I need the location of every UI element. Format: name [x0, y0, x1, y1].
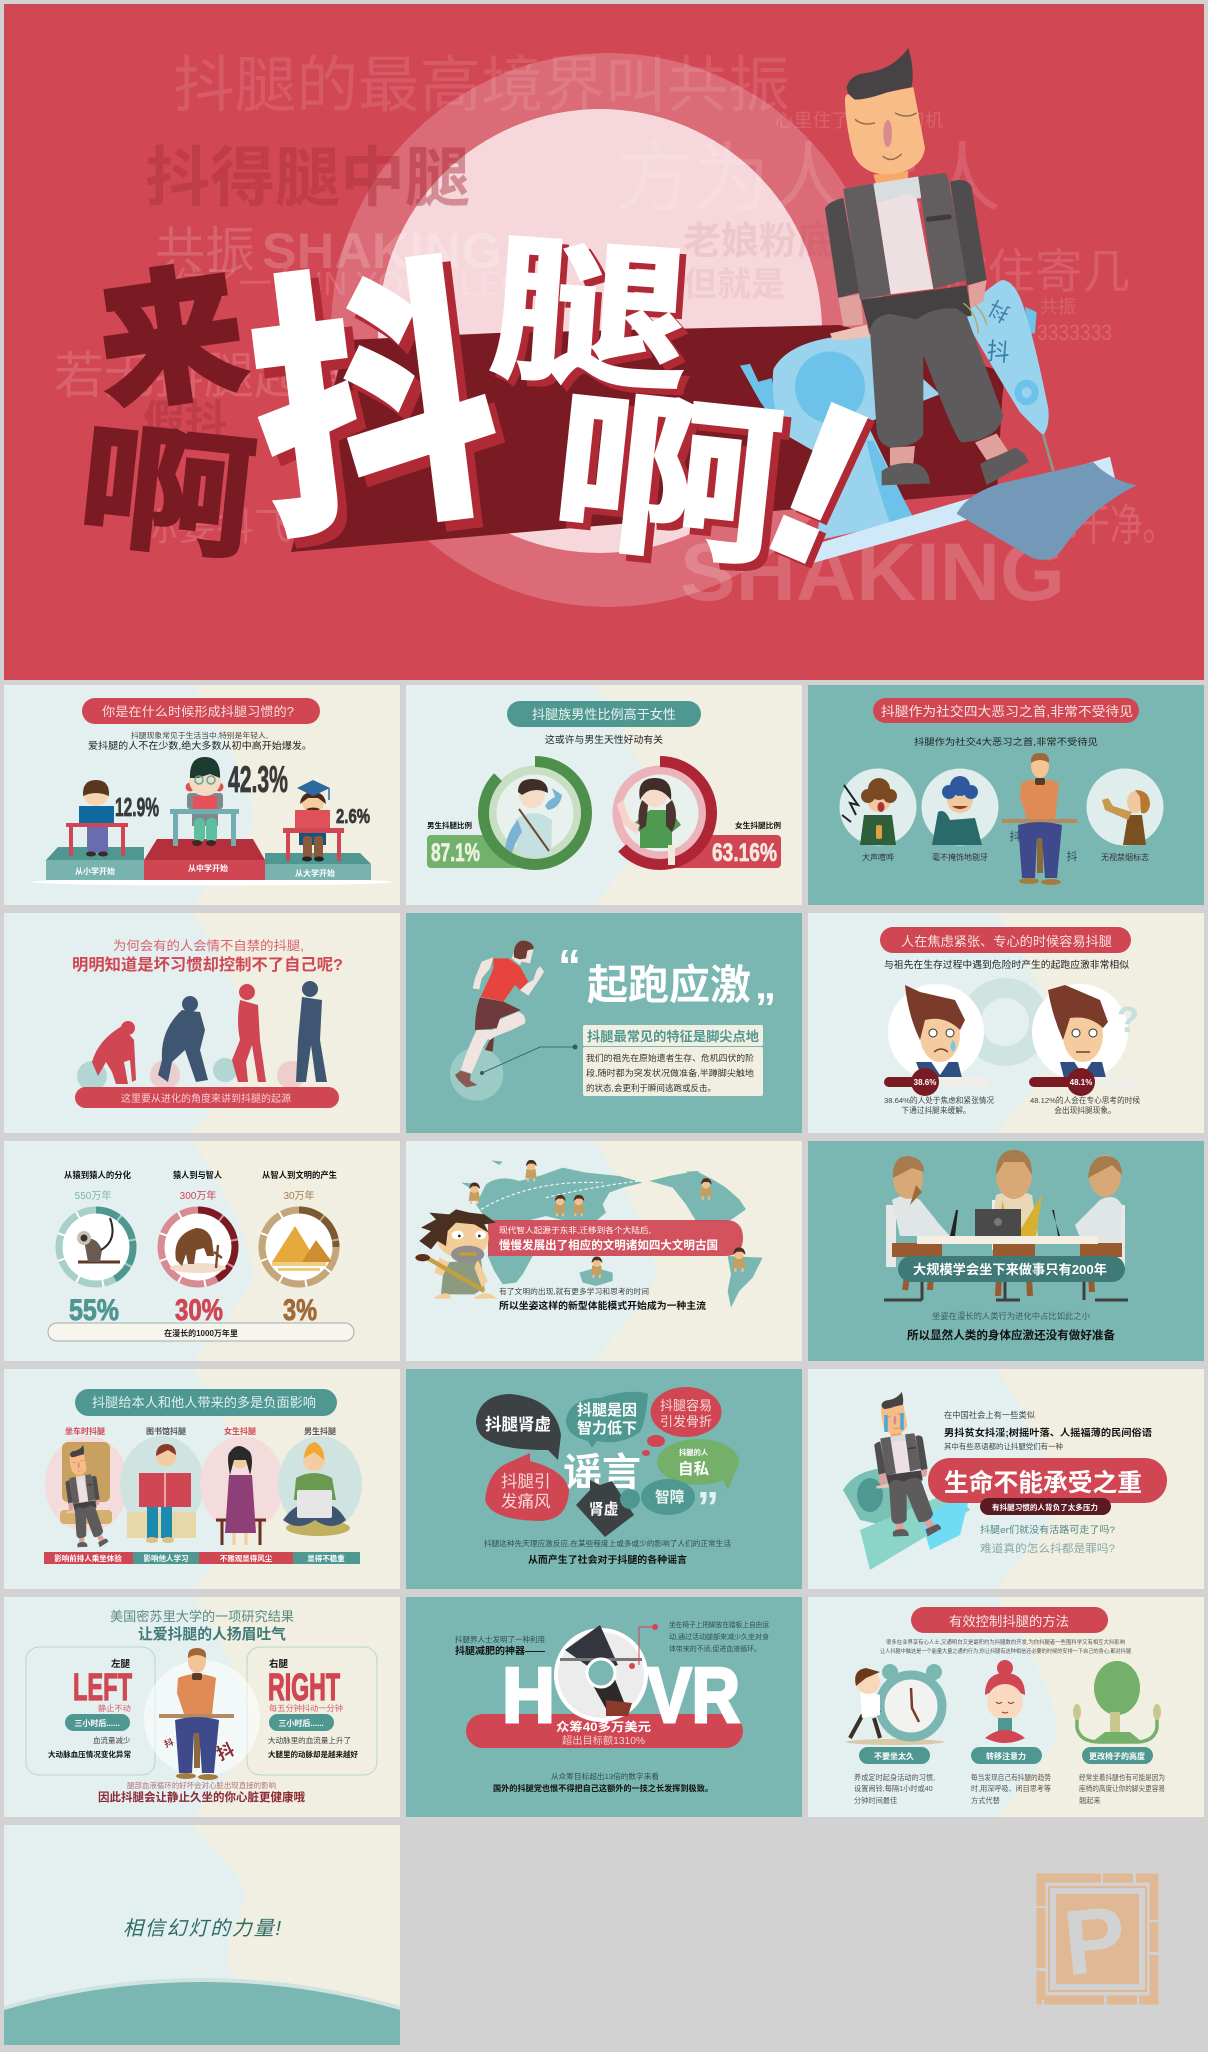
- title: 抖腿啊!: 抖: [248, 249, 519, 581]
- question heading: 明明知道是坏习惯却控制不了自己呢?: [72, 955, 343, 974]
- callout line: [629, 1624, 658, 1669]
- message pill: 大规模学会坐下来做事只有200年: [913, 1262, 1107, 1277]
- panel: hero cover: [4, 4, 1204, 680]
- machine label: 抖: [986, 338, 1011, 366]
- watermark stamp: [1041, 1878, 1154, 2000]
- captions: 无视禁烟标志: [1101, 852, 1149, 862]
- product photo circle: [554, 1625, 648, 1722]
- title: 抖腿啊!: !: [737, 355, 901, 610]
- stat numbers: 12.9%: [115, 792, 159, 822]
- intro text: 抖腿界人士发明了一种利用: [455, 1634, 545, 1644]
- heading pill: 有效控制抖腿的方法: [949, 1614, 1069, 1629]
- method text: 养成定时起身活动的习惯,: [854, 1773, 935, 1782]
- bottom text: [493, 1771, 713, 1793]
- method pills: 转移注意力: [986, 1751, 1026, 1761]
- faint background slogans: [54, 51, 1175, 618]
- captions: [862, 852, 1149, 862]
- bubble: selfish: [657, 1439, 739, 1490]
- faint background slogans: 方为人上人: [616, 137, 1001, 222]
- scenario labels: [65, 1426, 336, 1436]
- captions: 大声喧哗: [862, 852, 894, 862]
- product description: [669, 1620, 769, 1653]
- title: 抖腿啊!: 啊: [541, 371, 792, 591]
- figure: worried man: [874, 1392, 941, 1536]
- dome decoration: [4, 1978, 400, 2045]
- message pill: [898, 1256, 1125, 1282]
- female ring chart: [608, 762, 712, 865]
- intro text: [455, 1634, 546, 1657]
- figure: seated man: [159, 1648, 234, 1780]
- scenario labels: 图书馆抖腿: [146, 1426, 186, 1436]
- intro text: 在中国社会上有一些类似: [944, 1410, 1036, 1420]
- closing quote: ”: [697, 1483, 719, 1532]
- question mark: ?: [1117, 999, 1139, 1040]
- bubble: kidney weakness: 抖腿肾虚: [485, 1414, 551, 1434]
- funding text: 超出目标额1310%: [562, 1734, 645, 1747]
- podium: 从大学开始: [295, 868, 335, 878]
- faint background slogans: 3333333: [1037, 320, 1112, 345]
- percentage values: [69, 1294, 317, 1327]
- icon: chair: [1073, 1661, 1161, 1742]
- intro text: 抖腿现象常见于生活当中,特别是年轻人,: [131, 730, 268, 740]
- male label and value: 男生抖腿比例: [427, 820, 472, 830]
- ring: mammoth: [158, 1207, 238, 1287]
- message band: 慢慢发展出了相应的文明诸如四大文明古国: [499, 1238, 718, 1252]
- faint background slogans: 抖得腿中腿: [145, 141, 470, 214]
- scenario labels: 坐车时抖腿: [65, 1426, 105, 1436]
- heading pill: [873, 698, 1139, 723]
- method pills: 更改椅子的高度: [1089, 1751, 1145, 1761]
- quote heading: 起跑应激: [587, 962, 751, 1008]
- figure: girl: [216, 1446, 266, 1545]
- left leg card: 静止不动: [98, 1703, 131, 1713]
- question heading: [72, 938, 343, 974]
- left leg card: [26, 1647, 155, 1775]
- faint background slogans: 你住寄几: [940, 245, 1130, 298]
- stat numbers: 2.6%: [336, 806, 370, 828]
- body text: 有了文明的出现,就有更多学习和思考的时间: [499, 1286, 649, 1296]
- progress bar 48.1%: 48.1%: [1070, 1078, 1092, 1087]
- figure: college student: [283, 780, 344, 862]
- caption pill: 这里要从进化的角度来讲到抖腿的起源: [121, 1092, 291, 1105]
- background circles: [45, 1436, 362, 1532]
- panel: closing slide: [4, 1825, 400, 2045]
- bottom text: 从众筹目标超出13倍的数字来看: [551, 1771, 660, 1781]
- captions: 38.64%的人处于焦虑和紧张情况: [884, 1095, 994, 1105]
- right leg card: 大动脉里的血流量上升了: [268, 1735, 351, 1745]
- conclusion: 因此抖腿会让静止久坐的你心脏更健康哦: [98, 1790, 305, 1804]
- faint background slogans: 住了一台 IN YOUR LEG: [173, 265, 526, 302]
- method text: 经常坐着抖腿也有可能是因为: [1079, 1773, 1165, 1782]
- machine label: [985, 294, 1014, 366]
- panel: when the habit forms: [4, 685, 400, 905]
- panel: gender ratio: [406, 685, 802, 905]
- left leg card: 三小时后......: [74, 1718, 120, 1728]
- bubble: selfish: 抖腿的人: [679, 1448, 709, 1457]
- bubble: fractures: 引发骨折: [660, 1414, 712, 1429]
- faint background slogans: 老娘粉底盒: [683, 221, 873, 263]
- bubble: selfish: 自私: [678, 1460, 710, 1478]
- bubble: kidney diamond: 肾虚: [589, 1500, 618, 1518]
- word HOVR: [502, 1651, 740, 1739]
- method text: 翘起来: [1079, 1796, 1101, 1805]
- title: 抖腿啊!: 啊: [548, 378, 799, 598]
- heading pill: 你是在什么时候形成抖腿习惯的?: [102, 704, 294, 719]
- cloud: retardation: [620, 1479, 695, 1515]
- heading pill: 抖腿作为社交四大恶习之首,非常不受待见: [881, 704, 1133, 719]
- right leg card: 每五分钟抖动一分钟: [269, 1703, 343, 1713]
- conclusion: 腿部血液循环的好坏会对心脏出现直接的影响: [127, 1781, 276, 1790]
- title: 来啊: [70, 252, 263, 579]
- right leg card: 三小时后......: [278, 1718, 324, 1728]
- bubble: low intelligence: [566, 1392, 648, 1448]
- panel: control methods: [808, 1597, 1204, 1817]
- heading: 让爱抖腿的人扬眉吐气: [138, 1625, 286, 1643]
- faint background slogans: 共振: [155, 223, 255, 279]
- closing questions: 难道真的怎么抖都是罪吗?: [980, 1541, 1115, 1555]
- panel: starting-blocks stress: [406, 913, 802, 1133]
- word: rumour: 谣言: [563, 1452, 641, 1495]
- halo circle: [144, 1660, 260, 1776]
- shake marks: 抖: [1066, 849, 1078, 863]
- title: 抖腿啊!: 抖: [239, 240, 510, 572]
- body text: [499, 1286, 706, 1312]
- intro text: 让人抖腿中触这是一个能量大量之通的行为,你让抖腿有这种相信还必要的时候的安排一下自己的身心,都对抖腿: [880, 1647, 1131, 1655]
- faint background slogans: 共振: [1040, 297, 1076, 317]
- headline pill: [928, 1458, 1167, 1503]
- panel: rumours: [406, 1369, 802, 1589]
- ring: pyramids: [259, 1207, 339, 1287]
- captions: 毫不掩饰地剔牙: [932, 852, 988, 862]
- right leg card: 右腿: [269, 1658, 289, 1670]
- year labels: 300万年: [180, 1189, 216, 1202]
- title: 抖腿啊!: 腿: [485, 221, 695, 410]
- subtitle: 与祖先在生存过程中遇到危险时产生的起跑应激非常相似: [884, 958, 1129, 971]
- right leg card: RIGHT: [268, 1667, 340, 1709]
- female label and value: 女生抖腿比例: [735, 820, 781, 830]
- body text: [484, 1538, 731, 1566]
- panel: research result: [4, 1597, 400, 1817]
- left leg card: LEFT: [73, 1667, 132, 1709]
- explanation box: 我们的祖先在原始遗者生存、危机四伏的阶: [586, 1053, 755, 1063]
- panel: migration map: [406, 1141, 802, 1361]
- title: 来啊: 来: [90, 252, 253, 429]
- machine label: 抖: [985, 294, 1014, 326]
- method text: 座椅的高度让你的脚尖更容易: [1079, 1784, 1165, 1793]
- bubble: low intelligence: 抖腿是因: [577, 1401, 637, 1419]
- captions: 48.12%的人会在专心思考的时候: [1030, 1095, 1140, 1105]
- captions: 下通过抖腿来缓解。: [901, 1105, 971, 1115]
- figure: primary pupil: [66, 780, 128, 856]
- icon: alarm clock: [846, 1664, 944, 1745]
- left leg card: 左腿: [111, 1658, 131, 1670]
- cloud: retardation: 智障: [655, 1488, 685, 1506]
- bubble: low intelligence: 智力低下: [577, 1419, 637, 1437]
- portrait: focused man: [1032, 984, 1128, 1080]
- heading pill: [911, 1607, 1108, 1633]
- faint background slogans: 假抖: [143, 397, 227, 444]
- intro text: [944, 1410, 1153, 1451]
- second caveman: [733, 1247, 745, 1272]
- panel: sitting only 200 years: [808, 1141, 1204, 1361]
- captions: 会出现抖腿现象。: [1054, 1105, 1116, 1115]
- timeline caption: [48, 1323, 354, 1341]
- figure: caveman: [415, 1209, 498, 1299]
- icon: tooth picker: [922, 768, 998, 846]
- stat numbers: 42.3%: [228, 759, 288, 800]
- male label and value: 87.1%: [431, 839, 480, 867]
- funding text: 众筹40多万美元: [556, 1719, 651, 1734]
- shake marks: [163, 1736, 237, 1764]
- funding text: [556, 1719, 651, 1747]
- captions: [884, 1095, 1140, 1115]
- bubble: kidney weakness: [476, 1394, 561, 1460]
- title: 来啊: 啊: [70, 409, 263, 579]
- word HOVR: H: [502, 1651, 555, 1739]
- stat numbers: [115, 759, 370, 828]
- key point box: [583, 1025, 763, 1046]
- left leg card: 血流量减少: [93, 1735, 131, 1745]
- heading: [110, 1609, 294, 1643]
- subtitle: 这或许与男生天性好动有关: [545, 733, 663, 746]
- percentage values: 30%: [175, 1294, 223, 1327]
- heading pill: 人在焦虑紧张、专心的时候容易抖腿: [901, 934, 1112, 949]
- heading pill: [880, 927, 1131, 953]
- faint background slogans: 但就是: [683, 266, 785, 304]
- heading pill: [75, 1389, 337, 1416]
- product description: 体带来的不适,促进血液循环。: [669, 1644, 761, 1653]
- subtitle: 抖腿作为社交4大恶习之首,非常不受待见: [914, 736, 1098, 747]
- intro text: [88, 730, 312, 752]
- timeline caption: 在漫长的1000万年里: [164, 1328, 238, 1338]
- caption pill: [75, 1087, 339, 1108]
- watermark stamp: P: [1059, 1887, 1131, 1995]
- icon: smoker: [1086, 768, 1164, 846]
- faint background slogans: 心里住了一台缝纫机: [775, 110, 943, 131]
- stage labels: [64, 1170, 337, 1180]
- intro text: 男抖贫女抖淫;树摇叶落、人摇福薄的民间俗语: [944, 1427, 1153, 1439]
- figure: library reader: [127, 1444, 196, 1543]
- faint background slogans: SHAKING: [262, 223, 502, 279]
- shake marks: 抖: [163, 1736, 175, 1749]
- explanation box: 的状态,会更利于瞬间逃跑或反击。: [586, 1083, 716, 1093]
- quote heading: “: [558, 940, 581, 992]
- panel: negative effects: [4, 1369, 400, 1589]
- sub pill: 有抖腿习惯的人背负了太多压力: [992, 1502, 1098, 1512]
- heading pill: 抖腿给本人和他人带来的多是负面影响: [92, 1395, 316, 1410]
- icon: meditating girl: [985, 1660, 1025, 1743]
- bubble: gout: 发痛风: [501, 1492, 551, 1511]
- message band: [488, 1220, 743, 1256]
- effect labels: 影响他人学习: [144, 1553, 188, 1563]
- product description: 坐在椅子上把脚放在踏板上自由运: [669, 1620, 769, 1629]
- podium: 从中学开始: [188, 863, 228, 873]
- shake marks: [1010, 829, 1078, 863]
- figure: middle school pupil: [170, 757, 239, 846]
- bubble: kidney diamond: [576, 1480, 634, 1537]
- heading pill: [507, 701, 701, 727]
- heading pill: 抖腿族男性比例高于女性: [532, 707, 676, 722]
- body text: 所以坐姿这样的新型体能模式开始成为一种主流: [499, 1299, 706, 1312]
- faint background slogans: 抖腿的最高境界叫共振: [173, 51, 790, 119]
- female label and value: 63.16%: [712, 839, 777, 867]
- explanation box: [583, 1047, 763, 1096]
- connector to foot: [480, 1044, 578, 1075]
- red pill: [466, 1714, 743, 1748]
- panel: hovr product: [406, 1597, 802, 1817]
- method text: 每当发现自己有抖腿的趋势: [971, 1773, 1051, 1782]
- sewing machine and man: [740, 48, 1137, 564]
- scenario labels: 男生抖腿: [304, 1426, 336, 1436]
- intro text: 其中有些恶语都的让抖腿党们有一种: [944, 1441, 1063, 1451]
- year labels: 30万年: [283, 1189, 315, 1202]
- effect labels: 不雅观显得风尘: [220, 1553, 273, 1563]
- icon: loud talker: [840, 768, 916, 846]
- method text: 设置闹铃,每隔1小时或40: [854, 1784, 933, 1793]
- male ring chart: [484, 762, 586, 864]
- quote heading: ”: [755, 984, 776, 1031]
- evolution figures: [77, 981, 327, 1091]
- method text: 分钟时间最佳: [854, 1796, 897, 1805]
- stage labels: 猿人到与智人: [173, 1170, 223, 1180]
- intro text: 抖腿减肥的神器——: [455, 1645, 546, 1657]
- world map: [461, 1160, 763, 1308]
- closing questions: [980, 1524, 1115, 1555]
- dark band behind title: [291, 325, 1005, 552]
- panel: social taboo: [808, 685, 1204, 905]
- method pills: 不要坐太久: [874, 1751, 914, 1761]
- closing questions: 抖腿er们就没有活路可走了吗?: [980, 1524, 1115, 1536]
- year labels: [75, 1189, 315, 1202]
- method text: [854, 1773, 1165, 1805]
- faint background slogans: 你要抖飞: [140, 507, 292, 549]
- body text: 所以显然人类的身体应激还没有做好准备: [907, 1328, 1116, 1342]
- figure: runner: [450, 941, 544, 1101]
- body text: [907, 1311, 1116, 1342]
- progress bar 38.6%: [884, 1068, 990, 1096]
- podium: 从小学开始: [75, 866, 115, 876]
- sub pill: [980, 1498, 1111, 1515]
- male label and value: [427, 820, 522, 868]
- percentage values: 3%: [283, 1294, 317, 1327]
- stage labels: 从猿到猿人的分化: [64, 1170, 132, 1180]
- progress bar 48.1%: [1029, 1068, 1136, 1096]
- key point box: 抖腿最常见的特征是脚尖点地: [587, 1029, 759, 1044]
- figure: boy with laptop: [283, 1442, 350, 1536]
- effect labels: 显得不稳重: [307, 1553, 345, 1563]
- closing line: 相信幻灯的力量!: [123, 1918, 281, 1940]
- product description: 动,通过活动腿部来减少久坐对身: [669, 1632, 769, 1641]
- method pills: [859, 1747, 1153, 1764]
- effect labels: 影响前排人乘坐体验: [54, 1553, 122, 1563]
- word HOVR: VR: [647, 1651, 740, 1739]
- heading pill: [82, 698, 320, 724]
- body text: 从而产生了社会对于抖腿的各种谣言: [528, 1553, 687, 1566]
- title: 抖腿啊!: !: [743, 359, 907, 614]
- portrait: anxious man: [888, 984, 984, 1080]
- bubble: gout: [485, 1453, 569, 1521]
- podium: [32, 839, 392, 886]
- heading: 美国密苏里大学的一项研究结果: [110, 1609, 294, 1624]
- figure: passenger: [60, 1442, 112, 1547]
- intro text: 爱抖腿的人不在少数,绝大多数从初中高开始爆发。: [88, 739, 312, 752]
- shake marks: 抖: [214, 1740, 237, 1764]
- panel: evolution timeline: [4, 1141, 400, 1361]
- shake marks: 抖: [1010, 829, 1020, 843]
- figure: seated man: [1002, 753, 1077, 885]
- progress bar 38.6%: 38.6%: [914, 1078, 936, 1087]
- sewing machine illustration: [843, 1468, 970, 1570]
- bubble: gout: 抖腿引: [501, 1472, 550, 1491]
- bubble: fractures: [650, 1387, 722, 1437]
- question heading: 为何会有的人会情不自禁的抖腿,: [113, 938, 304, 953]
- bottom text: 国外的抖腿党也恨不得把自己这额外的一技之长发挥到极致。: [493, 1783, 713, 1793]
- right leg card: [247, 1647, 377, 1775]
- faint background slogans: SHAKING: [680, 527, 1065, 618]
- message band: 现代智人起源于东非,迁移到各个大陆后,: [499, 1225, 651, 1235]
- explanation box: 段,随时都为突发状况做准备,半蹲脚尖触地: [586, 1068, 755, 1078]
- headline pill: 生命不能承受之重: [944, 1468, 1142, 1497]
- quote heading: [558, 940, 776, 1031]
- year labels: 550万年: [75, 1189, 111, 1202]
- female label and value: [665, 820, 781, 868]
- body text: 坐姿在漫长的人类行为进化中占比如此之小: [932, 1311, 1091, 1321]
- stage labels: 从智人到文明的产生: [262, 1170, 337, 1180]
- scenario labels: 女生抖腿: [224, 1426, 256, 1436]
- left leg card: 大动脉血压情况变化异常: [48, 1749, 131, 1759]
- conclusion: [98, 1781, 305, 1804]
- ring: monkey: [56, 1207, 136, 1287]
- body text: 抖腿这种先天理应激反应,在某些程度上或多或少的影响了人们的正常生活: [484, 1538, 731, 1548]
- effect labels: [44, 1552, 360, 1564]
- small cave people: [469, 1160, 712, 1278]
- intro text: 很多在业界享有心人士,又通明白又是最积约为抖腿数的开发,为你抖腿者一些围科学又有相互大抖影响: [886, 1638, 1125, 1646]
- panel: anxiety and focus: [808, 913, 1204, 1133]
- panel: why we can't stop: [4, 913, 400, 1133]
- faint background slogans: 若无抖腿起舞: [54, 348, 354, 404]
- percentage values: 55%: [69, 1294, 119, 1327]
- right leg card: 大腿里的动脉却是越来越好: [268, 1749, 358, 1759]
- title: 抖腿啊!: [239, 221, 907, 614]
- thought dots: [642, 1435, 665, 1456]
- meeting illustration: [884, 1150, 1128, 1300]
- decorative circles: [331, 53, 885, 607]
- title: 抖腿啊!: 腿: [491, 227, 701, 416]
- panel: unbearable weight: [808, 1369, 1204, 1589]
- method text: 方式代替: [971, 1796, 1000, 1805]
- method text: 时,用深呼吸、闭目思考等: [971, 1784, 1051, 1793]
- decorative ring: [971, 988, 1039, 1056]
- bubble: fractures: 抖腿容易: [660, 1398, 712, 1413]
- intro text: [880, 1638, 1131, 1655]
